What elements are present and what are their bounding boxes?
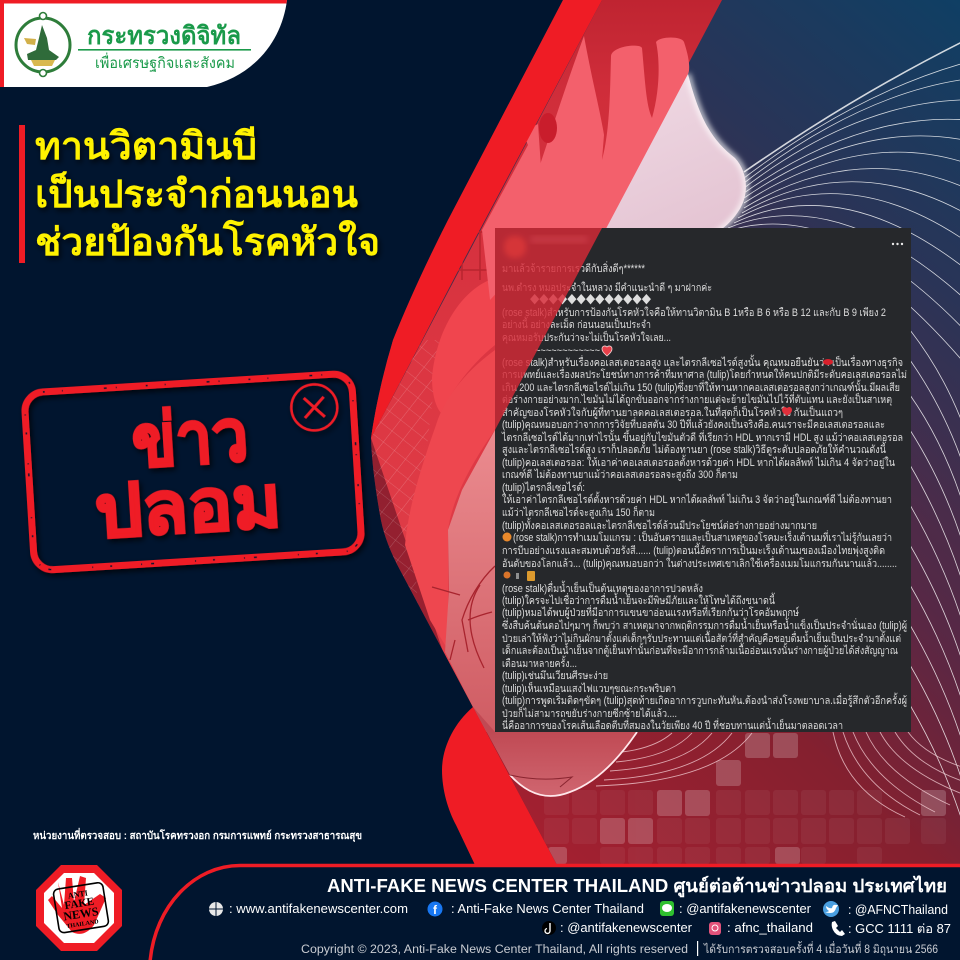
post text: (tulip)เห็นเหมือนแสงไฟแวบๆขณะกระพริบตา [502, 681, 676, 695]
copyright line: Copyright © 2023, Anti-Fake News Center Thailand, All rights reserved [301, 944, 688, 956]
stamp wording [89, 394, 283, 553]
translucent red tint on the picture [371, 0, 722, 732]
post text: (tulip)การพูดเริ่มติดๆขัดๆ (tulip)สุดท้ายเกิดอาการวูบกะทันหัน.ต้องนำส่งโรงพยาบาล.เมื่อรู้สึกตัวอีกครั้งผู้ [502, 692, 907, 707]
brick lines [442, 231, 486, 280]
footer contact: Facebook: f [433, 903, 438, 917]
post text: แม้ว่าไตรกลีเซอไรด์จะสูงเกิน 150 ก็ตาม [502, 505, 655, 519]
fake news stamp [24, 373, 362, 571]
vessel opening [539, 113, 557, 143]
post text: สำคัญของโรคหัวใจกับผู้ที่ทานยาลดคอเลสเตอรอล.ในที่สุดก็เป็นโรคหัวใจ กันเป็นแถวๆ [502, 405, 843, 419]
icon: collision emoji [502, 532, 512, 542]
solid red diagonal band [371, 0, 602, 438]
post text: (rose stalk)ดื่มน้ำเย็นเป็นต้นเหตุของอาการปวดหลัง [502, 580, 703, 595]
black stamp wording: NEWS [62, 904, 100, 923]
post text: (rose stalk)การทำเมมโมแกรม : เป็นอันตรายและเป็นสาเหตุของโรคมะเร็งเต้านมที่เราไม่รู้กันเลยว่า [513, 530, 892, 544]
black stamp wording: THAILAND [66, 919, 100, 930]
black stamp wording: ANTI [67, 888, 88, 901]
title accent bar [19, 125, 25, 263]
upper vessel [432, 278, 495, 414]
title text: ช่วยป้องกันโรคหัวใจ [35, 219, 380, 264]
post text: (tulip)เช่นมึนเวียนศีรษะง่าย [502, 669, 608, 682]
post text: (tulip)ทั้งคอเลสเตอรอลและไตรกลีเซอไรด์ล้วนมีประโยชน์ต่อร่างกายอย่างมากมาย [502, 517, 817, 532]
footer separator [697, 941, 698, 956]
footer contact: website: : www.antifakenewscenter.com [229, 902, 408, 916]
post text: (tulip)ไตรกลีเซอไรด์: [502, 481, 585, 494]
footer contact: TikTok: : @antifakenewscenter [560, 921, 692, 935]
heart: pink lower body beside the post [445, 430, 495, 732]
coronary vessels [432, 566, 495, 668]
post text: ป่วยก็ไม่สามารถขยับร่างกายซีกซ้ายได้แล้ว.... [502, 706, 677, 720]
lattice texture [372, 340, 439, 603]
post text: (tulip)คอเลสเตอรอล: ให้เอาค่าคอเลสเตอรอลตั้งหารด้วยค่า HDL หากได้ผลลัพท์ ไม่เกิน 4 จัดว่าอยู่ใน [502, 454, 895, 469]
post text [501, 261, 907, 732]
footer contact: Facebook: : Anti-Fake News Center Thailand [451, 902, 644, 916]
divider line [78, 49, 251, 51]
footer contact: Twitter [823, 901, 948, 917]
post text: สูงและไตรกลีเซอไรด์สูง เราก็ปลอดภัย ไม่ต้องทานยา (rose stalk)วิธีดูระดับปลอดภัยให้คำนวณดังนี้ [502, 441, 887, 456]
post text: นพ.ดำรง หมอประจำในหลวง มีคำแนะนำดี ๆ มาฝากค่ะ [502, 281, 712, 294]
icon: cross in circle [290, 383, 339, 432]
source agency note: หน่วยงานที่ตรวจสอบ : สถาบันโรคทรวงอก กรมการแพทย์ กระทรวงสาธารณสุข [33, 827, 362, 843]
post text: (rose stalk)สำหรับเรื่องคอเลสเตอรอลสูง และไตรกลีเซอไรด์สูงนั้น คุณหมอยืนยันว่า เป็นเรื่องทางธุรกิจ [502, 354, 903, 369]
ministry slogan: เพื่อเศรษฐกิจและสังคม [95, 52, 235, 72]
verification date: ได้รับการตรวจสอบครั้งที่ 4 เมื่อวันที่ 8 มิถุนายน 2566 [703, 941, 938, 956]
post text: นี่คืออาการของโรคเส้นเลือดตีบที่สมองในวัยเพียง 40 ปี ที่ชอบทานแต่น้ำเย็นมาตลอดเวลา [502, 717, 843, 732]
post text: การบีบอย่างแรงและสมทบด้วยรังสี...... (tulip)ตอนนี้อัตราการเป็นมะเร็งเต้านมของเมืองไทยพุ่งสูงติด [502, 542, 885, 557]
post text: อันดับของโลกแล้ว... (tulip)คุณหมอบอกว่า ในต่างประเทศเขาเลิกใช้เครื่องเมมโมแกรมกันนานแล้ว........ [502, 556, 897, 570]
panel: screenshot of the Facebook post [495, 228, 911, 732]
footer heading: ANTI-FAKE NEWS CENTER THAILAND ศูนย์ต่อต้านข่าวปลอม ประเทศไทย [327, 875, 947, 898]
wave lines: lower right [596, 732, 960, 817]
post text: คุณหมอรับประกันว่าจะไม่เป็นโรคหัวใจเลย... [502, 330, 671, 344]
post text: ต่อร่างกายอย่างมาก.ไขมันไม่ได้ถูกขับออกจากร่างกายแต่จะย้ายไขมันไปไว้ที่ตับแทน และยังเป็นสาเหตุ [502, 392, 892, 406]
footer panel with red curved edge [150, 866, 960, 960]
lower vessel [405, 350, 495, 650]
ministry name: กระทรวงดิจิทัล [87, 22, 241, 50]
footer contact: LINE: : @antifakenewscenter [679, 902, 811, 916]
blurred avatar [504, 236, 526, 258]
post text: (tulip)ใครจะไปเชื่อว่าการดื่มน้ำเย็นจะมีพิษมีภัยและให้โทษได้ถึงขนาดนี้ [502, 592, 776, 607]
post text: เกิน 200 และไตรกลีเซอไรด์ไม่เกิน 150 (tulip)ซึ่งยาที่ให้ทานหากคอเลสเตอรอลสูงกว่าเกณฑ์นั้น.มีผลเสีย [502, 379, 900, 394]
icon: ministry emblem [16, 12, 70, 76]
red top and left edge [0, 0, 287, 87]
stamp wording: ปลอม [93, 462, 283, 553]
footer contact: Twitter: : @AFNCThailand [848, 903, 948, 917]
title text: เป็นประจำก่อนนอน [35, 171, 358, 216]
vessels at the top of the heart [482, 36, 689, 300]
translucent red overlay across the top-left corner of the post [495, 228, 602, 430]
pixel squares [544, 733, 946, 864]
post text: เด็กและต้องเป็นน้ำเย็นจากตู้เย็นเท่านั้นก่อนที่จะมีอาการกล้ามเนื้ออ่อนแรงนั้นร่างกายผู้ป่วยได้ส่งสัญญาณ [502, 642, 898, 657]
stamp wording: ข่าว [130, 396, 250, 483]
title block [19, 125, 380, 264]
icon: lips emoji [823, 359, 833, 365]
post text: (tulip)หมอได้พบผู้ป่วยที่มีอาการแขนขาอ่อนแรงหรือที่เรียกกันว่าโรคอัมพฤกษ์ [502, 605, 799, 619]
title text [35, 126, 380, 264]
post text: เตือนมาหลายครั้ง... [502, 655, 577, 670]
post options dots [892, 243, 903, 245]
icon: drink emojis [504, 571, 535, 581]
post text: ให้เอาค่าไตรกลีเซอไรด์ตั้งหารด้วยค่า HDL หากได้ผลลัพท์ ไม่เกิน 3 จัดว่าอยู่ในเกณฑ์ดี ไม่ต้องทานยา [502, 491, 892, 506]
post text: เกณฑ์ดี ไม่ต้องทานยาแม้ว่าคอเลสเตอรอลจะสูงถึง 300 ก็ตาม [502, 467, 738, 481]
footer contact: phone: : GCC 1111 ต่อ 87 [848, 922, 951, 936]
header: ministry logo block [0, 0, 287, 87]
post text: มาแล้วจ้ารายการเรวดีกับสิ่งดีๆ****** [502, 261, 645, 275]
wave lines: upper right [716, 38, 960, 830]
icon: beating heart emoji [782, 407, 792, 416]
footer contact: Instagram: : afnc_thailand [727, 921, 813, 935]
icon: heart emoji [602, 346, 612, 356]
heart: lower tip under the post [473, 707, 637, 796]
post text: (tulip)คุณหมอบอกว่าจากการวิจัยที่บอสตัน 30 ปีที่แล้วยังคงเป็นจริงคือ.คนเราจะมีคอเลสเตอรอลและ [502, 417, 885, 431]
black stamp wording: FAKE [64, 896, 95, 912]
post text: ◆◆◆◆◆◆◆◆◆◆◆◆◆ [530, 293, 651, 306]
red hand [48, 876, 106, 934]
post text: (rose stalk)สำหรับการป้องกันโรคหัวใจคือให้ทานวิตามิน B 1หรือ B 6 หรือ B 12 และกับ B 9 เพียง 2 [502, 306, 886, 319]
background picture: heart with wave lines and pixel squares [330, 0, 960, 865]
post text: อย่างนี้ อย่างละเม็ด ก่อนนอนเป็นประจำ [502, 316, 651, 331]
distressed stamp texture [24, 373, 362, 571]
blurred account name [530, 236, 588, 243]
heart: pale upper body [606, 74, 746, 228]
icon: Anti-Fake News stop-sign logo [36, 865, 122, 951]
title text: ทานวิตามินบี [35, 126, 257, 168]
post text: ~~~~~~~~~~~~ [535, 345, 600, 357]
red lobe at the bottom [442, 707, 557, 865]
black stamp wording [53, 882, 109, 933]
